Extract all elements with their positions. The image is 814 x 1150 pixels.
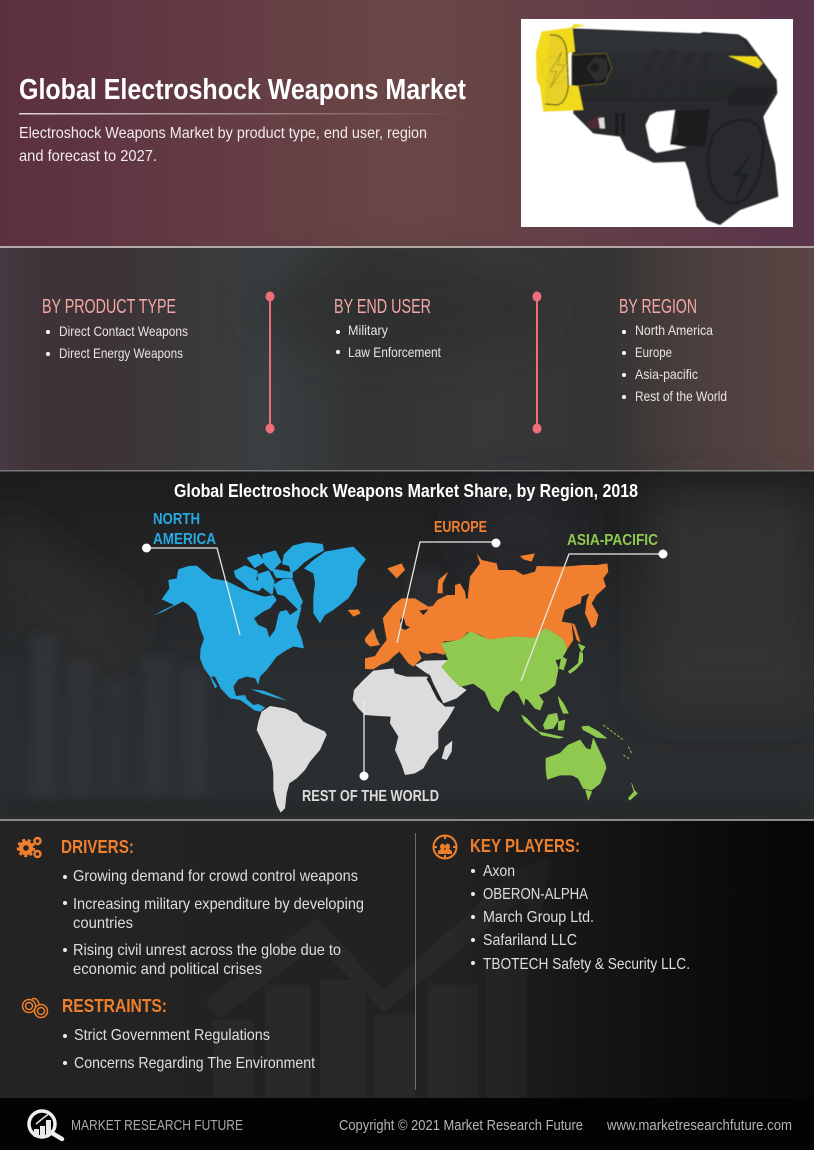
icon: handcuffs bbox=[22, 999, 48, 1018]
subtitle: and forecast to 2027. bbox=[19, 148, 157, 165]
list: drivers: Increasing military expenditure by developing bbox=[73, 896, 364, 913]
list: key players: March Group Ltd. bbox=[483, 909, 594, 926]
footer bbox=[0, 1098, 814, 1150]
column: by region: North America bbox=[635, 322, 713, 338]
map: north america bbox=[153, 543, 366, 712]
arctic islands bbox=[235, 543, 323, 608]
list: key players: Safariland LLC bbox=[483, 932, 577, 949]
list: drivers: Rising civil unrest across the globe due to bbox=[73, 942, 341, 959]
panel: regional map bbox=[0, 470, 814, 821]
icon: key players target bbox=[433, 835, 457, 859]
list: key players bbox=[471, 863, 690, 973]
list: key players: Axon bbox=[483, 863, 515, 880]
panel: segments bbox=[0, 246, 814, 470]
column: by region: Asia-pacific bbox=[635, 366, 698, 382]
column: by product type bbox=[42, 296, 188, 361]
column: by end user bbox=[334, 296, 441, 360]
column: by region: Europe bbox=[635, 344, 672, 360]
divider right bbox=[532, 292, 542, 434]
callout: rest of the world: REST OF THE WORLD bbox=[302, 788, 439, 805]
map: asia-pacific bbox=[442, 628, 637, 800]
list: drivers: economic and political crises bbox=[73, 961, 262, 978]
list: restraints bbox=[63, 1027, 315, 1072]
copyright: Copyright © 2021 Market Research Future bbox=[339, 1117, 583, 1134]
callout: asia-pacific bbox=[521, 532, 668, 681]
column: by product type: Direct Contact Weapons bbox=[59, 323, 188, 339]
chart title: Global Electroshock Weapons Market Share, by Region, 2018 bbox=[174, 481, 638, 501]
callout: north america bbox=[142, 511, 240, 635]
callout: asia-pacific: ASIA-PACIFIC bbox=[567, 532, 658, 549]
list: drivers: countries bbox=[73, 915, 133, 932]
list: restraints: Strict Government Regulations bbox=[74, 1027, 270, 1044]
heading: by product type: BY PRODUCT TYPE bbox=[42, 296, 176, 318]
list: drivers: Growing demand for crowd control weapons bbox=[73, 868, 358, 885]
map: europe and russia bbox=[348, 553, 608, 669]
list: key players: TBOTECH Safety & Security LLC. bbox=[483, 956, 690, 973]
callout: north america: AMERICA bbox=[153, 531, 216, 548]
callout: rest of the world bbox=[302, 700, 439, 805]
website: www.marketresearchfuture.com bbox=[606, 1117, 792, 1134]
logo text: MARKET RESEARCH FUTURE bbox=[71, 1117, 243, 1134]
icon: gears bbox=[18, 838, 40, 857]
panel: header bbox=[0, 0, 814, 246]
divider left bbox=[266, 292, 274, 434]
subtitle bbox=[19, 125, 427, 165]
logo icon bbox=[29, 1111, 62, 1139]
callout: europe: EUROPE bbox=[434, 519, 487, 536]
list: key players: OBERON-ALPHA bbox=[483, 886, 588, 903]
greenland bbox=[304, 547, 366, 623]
title: Global Electroshock Weapons Market bbox=[19, 74, 466, 106]
column: by end user: Law Enforcement bbox=[348, 344, 441, 360]
column: by region: Rest of the World bbox=[635, 388, 727, 404]
map: south america and africa bbox=[257, 660, 467, 813]
heading: drivers: DRIVERS: bbox=[61, 837, 134, 857]
list: drivers bbox=[63, 868, 364, 978]
heading: by end user: BY END USER bbox=[334, 296, 431, 318]
heading: restraints: RESTRAINTS: bbox=[62, 996, 167, 1016]
heading: key players: KEY PLAYERS: bbox=[470, 836, 580, 856]
callout: europe bbox=[397, 519, 500, 643]
image: stun gun bbox=[521, 19, 793, 227]
panel: drivers, restraints, key players bbox=[0, 821, 814, 1098]
subtitle: Electroshock Weapons Market by product type, end user, region bbox=[19, 125, 427, 142]
column: by region bbox=[619, 296, 727, 404]
heading: by region: BY REGION bbox=[619, 296, 697, 318]
column: by end user: Military bbox=[348, 322, 388, 338]
callout: north america: NORTH bbox=[153, 511, 200, 528]
list: restraints: Concerns Regarding The Environment bbox=[74, 1055, 315, 1072]
column: by product type: Direct Energy Weapons bbox=[59, 345, 183, 361]
